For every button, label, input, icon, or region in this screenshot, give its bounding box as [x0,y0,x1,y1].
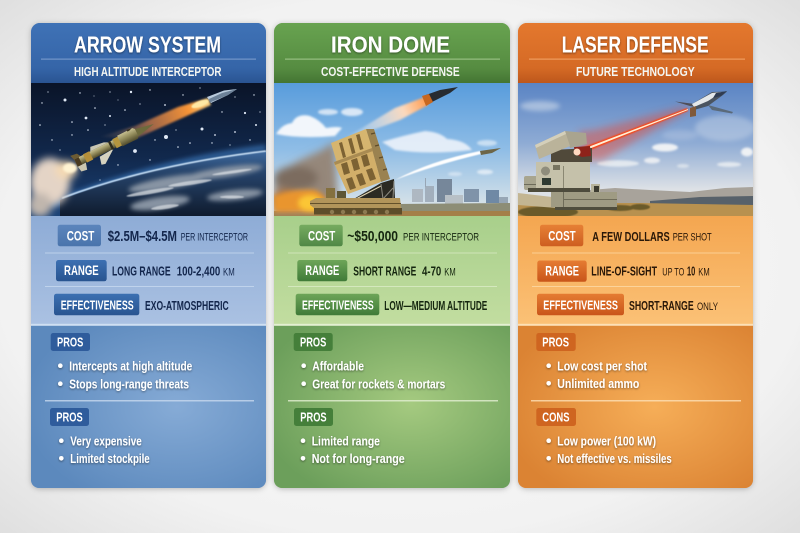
icon: laser turret building [518,131,617,210]
icon: lower missile [70,124,154,172]
list: second pros: Limited range [312,433,380,448]
stat: range: KM [444,266,456,278]
list: first pros [51,333,192,391]
stat: range: UP TO [662,266,685,278]
list: pros: Low cost per shot [557,358,648,373]
stat: effectiveness: EFFECTIVENESS [543,298,618,313]
stat: cost [58,225,248,246]
stats: Arrow System [31,216,266,326]
stat: effectiveness [54,294,229,315]
panel: Laser Defense [518,23,755,488]
header: Arrow System: ARROW SYSTEM [74,32,221,58]
icon: exhaust plume [28,158,77,217]
list: cons [536,408,672,466]
list: second pros: PROS [56,409,83,424]
list: first pros [294,333,445,391]
list: second pros: Very expensive [70,433,142,448]
stat: cost: COST [548,227,576,243]
stat: range: 10 [687,263,695,278]
stat: effectiveness: EXO-ATMOSPHERIC [145,298,229,313]
stat: effectiveness: EFFECTIVENESS [302,298,374,313]
stat: range [537,260,710,282]
stat: range: RANGE [545,262,579,278]
header: Iron Dome: COST-EFFECTIVE DEFENSE [321,64,460,79]
icon: upper missile and flame [98,89,237,139]
stat: effectiveness [537,294,718,315]
header: Laser Defense [518,23,753,83]
stat: range [56,260,235,281]
stat: cost [299,225,479,246]
header: Iron Dome [274,23,510,83]
icon: aircraft [675,91,733,117]
stat: effectiveness: SHORT-RANGE [629,298,694,313]
stat: range: RANGE [64,262,99,278]
image: laser beam hitting aircraft [518,83,755,218]
stat: range [297,260,456,281]
list: first pros: Intercepts at high altitude [69,358,192,373]
smoke and fire [271,142,338,215]
header: Arrow System: HIGH ALTITUDE INTERCEPTOR [74,64,222,79]
stat: range: RANGE [305,262,339,278]
list: second pros [50,408,150,466]
header: Arrow System [31,23,266,83]
image: interceptors rising above Earth [28,83,266,217]
list: pros [536,333,648,391]
stat: cost: COST [308,227,336,243]
icon: second rocket with trail [395,148,501,180]
list: second pros: PROS [300,409,327,424]
list: cons: CONS [542,409,570,424]
pros and cons: Iron Dome [274,326,510,488]
stat: cost: $2.5M–$4.5M [108,228,177,245]
icon: launcher [310,129,402,214]
stat: range: 4-70 [422,263,441,278]
stat: effectiveness: EFFECTIVENESS [61,298,134,313]
stat: effectiveness: LOW—MEDIUM ALTITUDE [384,298,488,313]
list: first pros: PROS [300,334,327,349]
panel: Arrow System [28,23,266,488]
header: Laser Defense: FUTURE TECHNOLOGY [576,64,695,79]
stat: range: 100-2,400 [177,263,220,278]
header: Laser Defense: LASER DEFENSE [562,32,709,58]
icon: main rocket with trail [352,87,458,134]
icon: laser beam [575,106,689,160]
list: pros: Unlimited ammo [557,376,639,391]
list: first pros: Great for rockets & mortars [312,376,445,391]
list: first pros: Affordable [312,358,364,373]
stat: range: LONG RANGE [112,263,171,278]
city skyline [412,178,508,206]
stat: cost: ~$50,000 [347,228,398,245]
list: pros: PROS [542,334,569,349]
stat: range: SHORT RANGE [353,263,417,278]
header: Iron Dome: IRON DOME [331,32,450,58]
stat: range: KM [223,266,235,278]
stats: Laser Defense [518,216,753,326]
stat: effectiveness: ONLY [697,301,718,313]
stat: cost: PER SHOT [673,232,712,244]
stat: cost [540,225,712,246]
list: cons: Low power (100 kW) [557,433,656,448]
list: second pros: Not for long-range [312,451,405,466]
list: second pros: Limited stockpile [70,451,150,466]
stats: Iron Dome [274,216,510,326]
pros and cons: Laser Defense [518,326,753,488]
stat: cost: PER INTERCEPTOR [181,232,248,244]
stat: cost: PER INTERCEPTOR [403,232,479,244]
stat: effectiveness [296,294,488,315]
pros and cons: Arrow System [31,326,266,488]
stat: range: LINE-OF-SIGHT [591,263,657,278]
list: cons: Not effective vs. missiles [557,451,672,466]
stat: cost: A FEW DOLLARS [592,229,670,244]
stat: range: KM [698,266,710,278]
stat: cost: COST [67,227,95,243]
list: second pros [294,408,405,466]
list: first pros: PROS [57,334,84,349]
list: first pros: Stops long-range threats [69,376,189,391]
panel: Iron Dome [271,23,510,488]
image: launcher firing over a city [271,83,510,216]
